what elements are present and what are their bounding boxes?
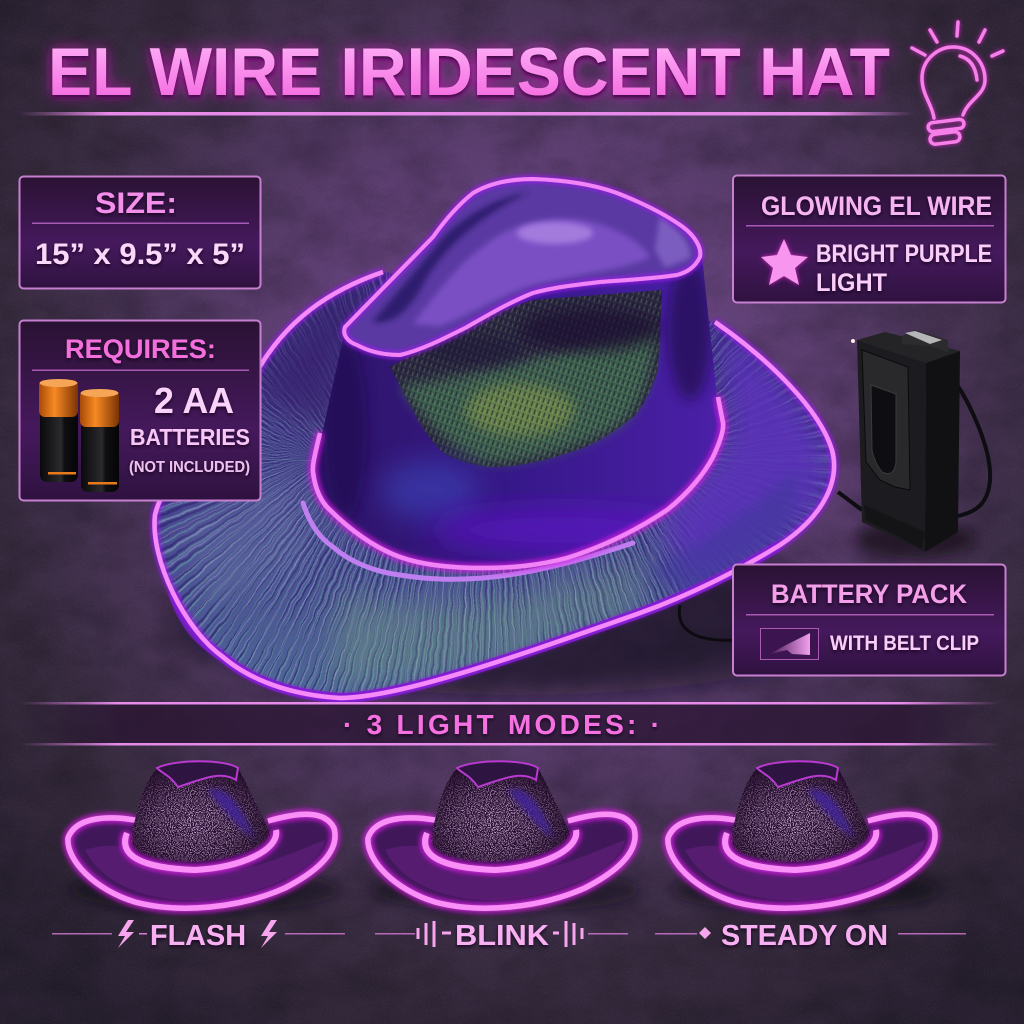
hat crown — [313, 179, 723, 568]
section: light modes banner — [20, 702, 1000, 746]
steady label: STEADY ON — [721, 920, 888, 952]
icon: light bulb — [912, 22, 1003, 145]
flash hat — [68, 760, 340, 912]
section heading: · 3 LIGHT MODES: · — [343, 709, 660, 740]
battery pack heading: BATTERY PACK — [771, 579, 967, 609]
panel: requires — [20, 320, 260, 500]
blink label — [375, 920, 628, 952]
requires heading: REQUIRES: — [65, 334, 216, 364]
flash label: FLASH — [150, 920, 246, 952]
main hat — [140, 179, 860, 710]
hat brim — [140, 260, 850, 710]
battery pack — [838, 330, 990, 558]
el wire description: LIGHT — [816, 269, 887, 297]
el wire description: BRIGHT PURPLE — [816, 240, 992, 268]
panel: size — [20, 176, 260, 288]
panel: battery pack — [733, 564, 1006, 676]
steady label — [655, 920, 966, 952]
hat band strip — [303, 503, 633, 579]
icon: belt clip — [760, 628, 818, 660]
crown top — [344, 179, 700, 355]
battery count: 2 AA — [154, 380, 234, 421]
cables — [838, 372, 990, 516]
mode: flash — [52, 760, 345, 952]
belt clip text: WITH BELT CLIP — [830, 632, 979, 655]
panel: glowing el wire — [733, 176, 1006, 302]
title: EL WIRE IRIDESCENT HAT — [48, 34, 890, 110]
flash label — [52, 920, 345, 952]
size heading: SIZE: — [95, 187, 177, 220]
icon: batteries — [39, 379, 119, 492]
el wire description — [816, 240, 992, 297]
blink label: BLINK — [455, 920, 549, 952]
mode: blink — [368, 760, 640, 952]
steady hat — [668, 760, 940, 912]
batteries text: BATTERIES — [130, 424, 250, 450]
not included note: (NOT INCLUDED) — [129, 459, 250, 476]
icon: star — [761, 239, 808, 285]
el wire heading: GLOWING EL WIRE — [761, 191, 992, 221]
blink hat — [368, 760, 640, 912]
size value: 15” x 9.5” x 5” — [35, 238, 245, 271]
mode: steady on — [655, 760, 966, 952]
